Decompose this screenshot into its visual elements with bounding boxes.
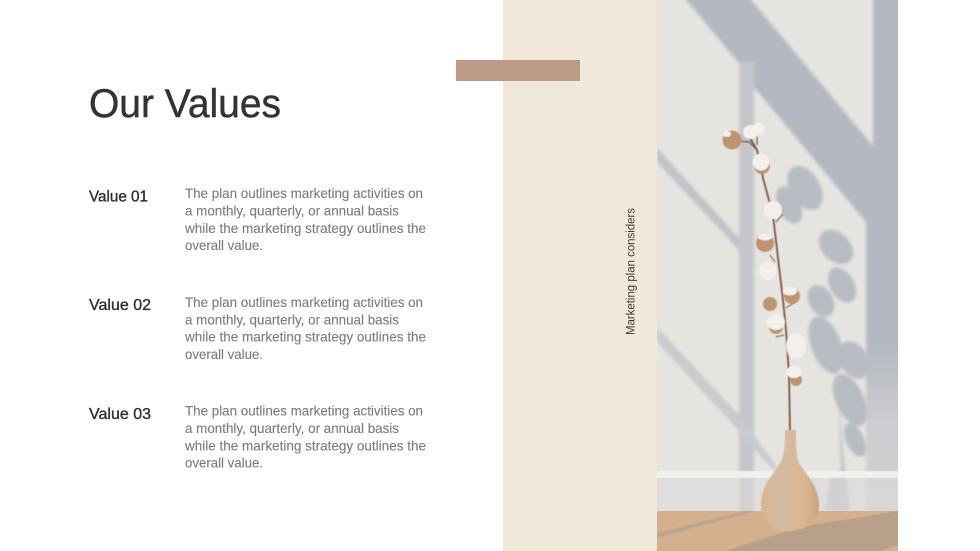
window shadows xyxy=(657,0,908,520)
accent bar xyxy=(456,60,580,81)
value 01 description: The plan outlines marketing activities on xyxy=(185,185,423,201)
floor xyxy=(657,511,898,551)
value 03 description: The plan outlines marketing activities on xyxy=(185,402,423,418)
value 03 description xyxy=(184,402,426,470)
value 02 description: overall value. xyxy=(185,346,263,362)
value 03 description: a monthly, quarterly, or annual basis xyxy=(185,420,399,436)
photo: cotton branch in vase xyxy=(657,0,908,551)
vase xyxy=(761,430,819,531)
value 01 label: Value 01 xyxy=(89,188,148,206)
value 03 xyxy=(89,402,426,470)
value 03 description: overall value. xyxy=(185,454,263,470)
panel: beige column xyxy=(503,0,657,551)
value 03 label: Value 03 xyxy=(89,406,151,423)
value 02 description: The plan outlines marketing activities on xyxy=(185,294,423,310)
value 01 description: overall value. xyxy=(185,237,263,253)
title: Our Values xyxy=(89,82,281,126)
value 02 xyxy=(89,294,426,362)
value 01 description: a monthly, quarterly, or annual basis xyxy=(185,202,399,218)
vertical caption: Marketing plan considers xyxy=(626,208,638,335)
value 01 description: while the marketing strategy outlines the xyxy=(184,220,426,236)
wall xyxy=(657,0,898,511)
stem xyxy=(738,130,795,430)
value 02 description: while the marketing strategy outlines the xyxy=(184,328,426,344)
value 02 description xyxy=(184,294,426,362)
cotton bolls xyxy=(722,123,806,386)
value 01 description xyxy=(184,185,426,253)
value 02 label: Value 02 xyxy=(89,297,151,314)
baseboard xyxy=(657,471,898,478)
value 01 xyxy=(89,185,426,253)
value 03 description: while the marketing strategy outlines the xyxy=(184,438,426,454)
value 02 description: a monthly, quarterly, or annual basis xyxy=(185,312,399,328)
leaf shadows xyxy=(774,164,868,510)
